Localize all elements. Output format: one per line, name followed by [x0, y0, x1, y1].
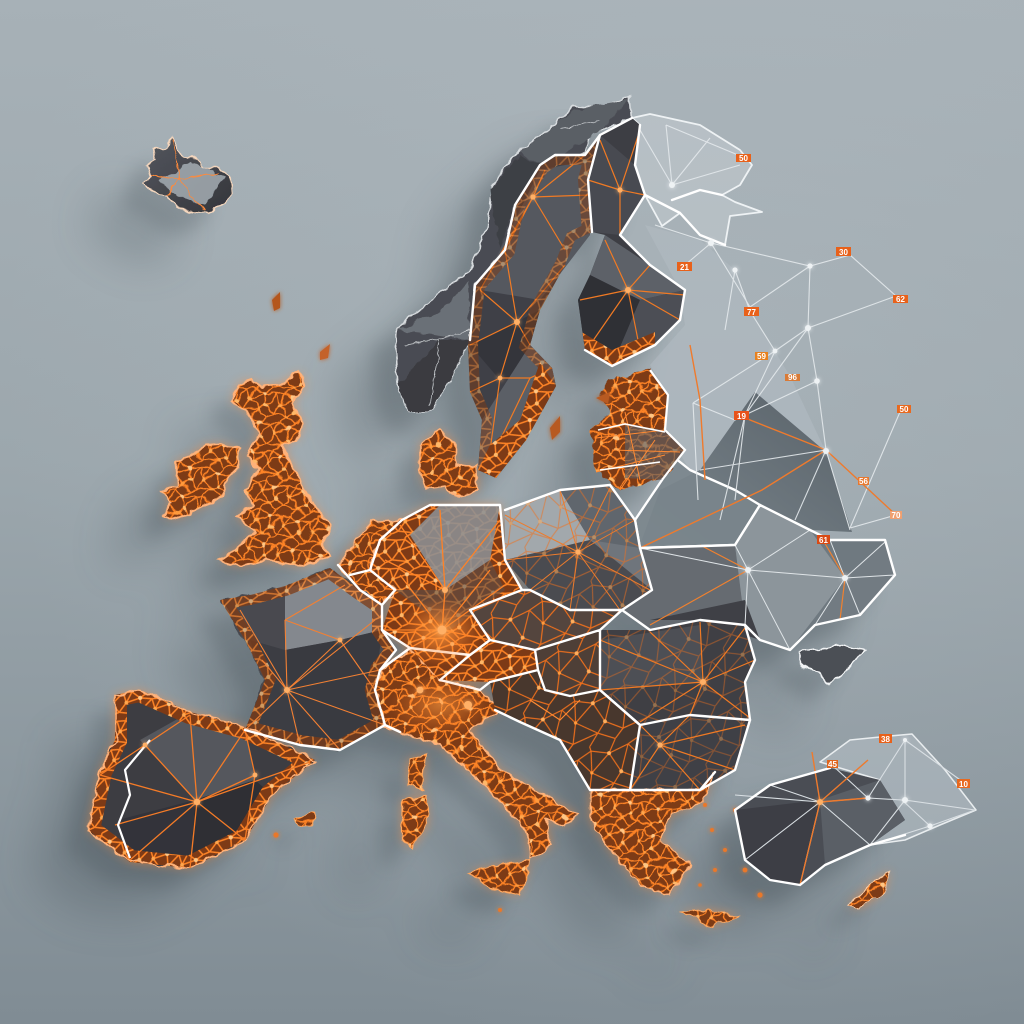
label 50: 50: [739, 154, 748, 163]
national borders and coast highlight: [245, 118, 905, 885]
label 19: 19: [737, 412, 746, 421]
label 96: [785, 373, 800, 382]
label 56: 56: [859, 477, 868, 486]
bright core over central europe: [390, 598, 490, 735]
country: spain and portugal: [88, 690, 315, 868]
label 38: 38: [881, 735, 890, 744]
ukraine network: [640, 530, 895, 650]
country: greece: [590, 772, 715, 895]
dark fan facet: [640, 392, 852, 545]
orange hubs: [143, 187, 823, 805]
country: baltic states: [590, 370, 685, 490]
country: bulgaria: [630, 715, 750, 790]
aegean island specks: [273, 803, 763, 912]
label 59: 59: [757, 352, 766, 361]
label 50: [736, 154, 751, 163]
panel: translucent eastern network region: [632, 114, 976, 845]
label 61: [817, 535, 830, 545]
country: norway: [394, 97, 632, 412]
country: benelux: [338, 520, 402, 605]
label 19: [734, 411, 749, 421]
country: austria and switzerland: [410, 640, 538, 682]
label 10: [957, 779, 970, 789]
country: finland: [578, 118, 685, 366]
portugal border: [118, 740, 150, 858]
western turkey veil: [820, 734, 976, 845]
label 30: [836, 247, 851, 257]
germany network: [380, 510, 505, 655]
country: former yugoslavia: [490, 670, 640, 790]
label 45: 45: [828, 760, 837, 769]
country: turkey: [735, 740, 975, 885]
kola peninsula: [632, 114, 762, 245]
network nodes: [143, 182, 933, 829]
russia veil: [645, 225, 850, 530]
label 50: 50: [900, 405, 909, 414]
pale hubs: [669, 182, 933, 829]
poland network: [505, 488, 650, 610]
network lines: orange east: [640, 345, 896, 578]
label 96: 96: [788, 373, 797, 382]
belarus: [635, 450, 760, 548]
country: great britain: [220, 372, 330, 566]
label 62: [893, 295, 908, 304]
label 59: [755, 352, 768, 361]
country: crimea: [800, 645, 865, 685]
country: ukraine: [622, 505, 895, 650]
iberia network: [100, 715, 310, 868]
label 77: [744, 307, 759, 317]
gotland and islands: [550, 392, 610, 440]
country: romania: [600, 620, 755, 725]
label 21: 21: [680, 263, 689, 272]
label 50: [897, 405, 911, 414]
country: ireland: [163, 444, 240, 518]
islands: mediterranean: [293, 755, 890, 926]
country: sweden: [468, 135, 600, 478]
small islands north: [272, 292, 330, 360]
label 70: 70: [892, 511, 901, 520]
label 61: 61: [819, 536, 828, 545]
country: italy: [375, 650, 578, 860]
finland network: [580, 130, 685, 350]
network lines: east: [640, 125, 900, 640]
country: france: [220, 568, 396, 750]
cast shadows of the landmass: [33, 117, 883, 974]
country: denmark: [420, 430, 478, 496]
label 77: 77: [747, 308, 756, 317]
country: germany: [370, 505, 522, 655]
sweden network: [470, 155, 590, 465]
romania network: [600, 622, 755, 722]
label 38: [879, 734, 892, 744]
label 21: [677, 262, 692, 272]
data labels: [677, 154, 970, 789]
orange halo around hot regions: [88, 372, 890, 926]
turkey network: [735, 740, 975, 885]
country: hungary: [535, 630, 600, 696]
country: poland: [505, 485, 652, 610]
country: iceland: [142, 137, 232, 214]
label 30: 30: [839, 248, 848, 257]
label 10: 10: [959, 780, 968, 789]
france network: [240, 585, 385, 750]
country: czechia and slovakia: [470, 590, 622, 650]
label 62: 62: [896, 295, 905, 304]
